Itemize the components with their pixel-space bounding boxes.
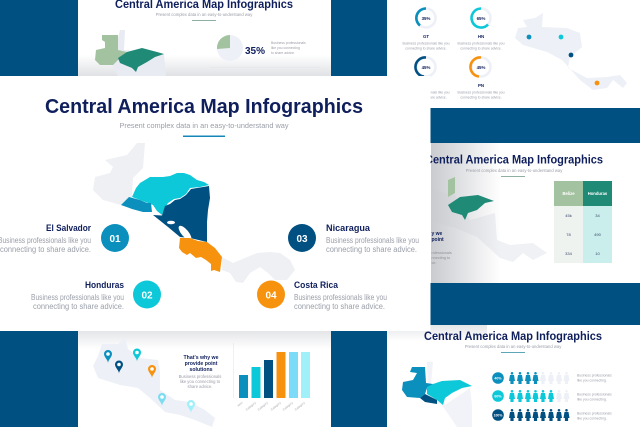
- table: [554, 181, 612, 263]
- right slide grey map: [431, 190, 547, 262]
- item: Nicaragua: connecting to share advice.: [326, 245, 417, 254]
- item: El Salvador: connecting to share advice.: [0, 245, 91, 254]
- row 40%: Business professionals: [577, 374, 612, 378]
- item: Honduras: connecting to share advice.: [33, 302, 124, 311]
- item: El Salvador: 01: [109, 234, 121, 245]
- map: El Salvador: [121, 197, 152, 212]
- donut descriptions: connecting to share advice.: [460, 96, 502, 100]
- pie value: 35%: [245, 46, 265, 57]
- table: 490: [594, 232, 602, 237]
- bar chart: [233, 343, 310, 412]
- right slide subtitle: Present complex data in an easy-to-understand way: [466, 168, 563, 173]
- table: 45k: [565, 213, 572, 218]
- bar chart: Category: [270, 400, 282, 412]
- donut descriptions: connecting to share advice.: [405, 96, 447, 100]
- row 60%: Business professionals: [577, 392, 612, 396]
- map: lakes: [167, 221, 193, 242]
- row 40%: like you connecting.: [577, 378, 607, 382]
- donut labels: PN: [478, 83, 484, 88]
- pie description: to share advice.: [271, 51, 295, 55]
- donut labels: GT: [423, 34, 429, 39]
- donut descriptions: Business professionals like you: [457, 90, 505, 94]
- donut 45 left: [415, 57, 436, 76]
- panel: main slide: [0, 76, 430, 331]
- panel: right slide with table: [387, 143, 640, 283]
- item: Nicaragua: Business professionals like you: [326, 236, 419, 245]
- item: Nicaragua: 03: [296, 234, 308, 245]
- donut labels: [422, 16, 485, 88]
- bottom right subtitle: Present complex data in an easy-to-understand way: [465, 344, 562, 349]
- map: grey countries: [93, 143, 295, 283]
- panel: top slide with pie chart: [78, 0, 331, 76]
- item: Costa Rica: [257, 280, 387, 311]
- right slide text: y we: [432, 231, 443, 237]
- map of Central America: [93, 143, 295, 283]
- item: Nicaragua: [288, 223, 419, 254]
- pin slide heading: solutions: [189, 367, 213, 373]
- pin blue: [104, 350, 112, 363]
- panel: bottom right slide with people rows: [387, 325, 640, 427]
- row 100%: like you connecting.: [577, 416, 607, 420]
- heading underline: [183, 136, 225, 137]
- bar chart: Item: [237, 400, 244, 408]
- item: El Salvador: [0, 223, 129, 254]
- panel: top right slide with donuts and dotted map: [402, 8, 627, 100]
- donut GT: [416, 8, 436, 28]
- item: Honduras: 02: [141, 290, 153, 302]
- pie description: Business professionals: [271, 41, 306, 45]
- bottom right map: [402, 362, 472, 427]
- pin slide text: like you connecting to: [180, 379, 221, 384]
- row 100%: [492, 409, 612, 421]
- pin slide text: Business professionals: [179, 374, 221, 379]
- table: 10: [595, 251, 600, 256]
- table: 78: [566, 232, 571, 237]
- item: El Salvador: El Salvador: [46, 223, 91, 233]
- pin light blue: [158, 393, 166, 406]
- donut HN: [472, 8, 490, 28]
- map: Nicaragua: [153, 186, 210, 242]
- pin slide text: share advice.: [188, 384, 212, 389]
- map: Costa Rica: [179, 238, 222, 272]
- row 40%: [492, 372, 612, 384]
- table: Honduras: [588, 191, 608, 196]
- item: Costa Rica: 04: [265, 290, 277, 302]
- pie chart 35%: [217, 35, 243, 61]
- right slide text: nnecting to: [432, 256, 450, 260]
- item: Honduras: [31, 280, 161, 311]
- bar chart: Category: [245, 400, 257, 412]
- pin map: [93, 338, 215, 427]
- donut descriptions: Business professionals like you: [457, 42, 505, 46]
- main subtitle: Present complex data in an easy-to-understand way: [120, 121, 289, 130]
- pin pale blue: [187, 400, 195, 413]
- row 100%: Business professionals: [577, 412, 612, 416]
- donut labels: 65%: [477, 16, 485, 21]
- top slide map: [95, 30, 166, 76]
- table: 34: [595, 213, 600, 218]
- pin cyan: [133, 348, 141, 362]
- pin orange: [148, 365, 156, 378]
- dotted map: [515, 13, 627, 90]
- donut descriptions: connecting to share advice.: [405, 46, 447, 50]
- row 60%: [492, 390, 612, 402]
- donut labels: HN: [478, 34, 484, 39]
- donut descriptions: Business professionals like you: [402, 90, 450, 94]
- donut descriptions: connecting to share advice.: [460, 46, 502, 50]
- item: Costa Rica: connecting to share advice.: [294, 302, 385, 311]
- item: Honduras: Business professionals like you: [31, 293, 124, 302]
- donut labels: 35%: [422, 16, 430, 21]
- item: Nicaragua: Nicaragua: [326, 223, 371, 233]
- table: Belize: [562, 191, 575, 196]
- item: El Salvador: Business professionals like you: [0, 236, 91, 245]
- row 60%: 60%: [494, 394, 502, 398]
- pin slide heading: That's why we: [184, 355, 219, 361]
- right slide text: ce.: [432, 261, 437, 265]
- right slide title: Central America Map Infographics: [425, 154, 603, 166]
- pin slide heading: [184, 355, 219, 373]
- bottom right title: Central America Map Infographics: [424, 331, 602, 343]
- donut labels: 45%: [422, 65, 430, 70]
- map: Honduras: [132, 173, 209, 215]
- top slide subtitle: Present complex data in an easy-to-understand way: [156, 12, 253, 17]
- item: Costa Rica: Business professionals like you: [294, 293, 387, 302]
- donut labels: 45%: [477, 65, 485, 70]
- pin slide heading: provide point: [185, 361, 218, 367]
- right slide text: [432, 231, 452, 265]
- main title: Central America Map Infographics: [45, 95, 363, 118]
- right slide coloured map: [448, 177, 494, 220]
- right slide text: point: [432, 237, 444, 243]
- item: Costa Rica: Costa Rica: [294, 280, 339, 290]
- pin navy: [115, 360, 123, 374]
- item: Honduras: Honduras: [85, 280, 124, 290]
- donut descriptions: [402, 42, 505, 100]
- panel: bottom left slide with pins and bars: [78, 331, 331, 427]
- row 40%: 40%: [494, 376, 502, 380]
- pin slide text: [179, 374, 221, 389]
- donut 45 right: [470, 57, 490, 76]
- right slide text: rofessionals: [432, 251, 452, 255]
- row 60%: like you connecting.: [577, 398, 607, 402]
- bar chart: Category: [282, 400, 294, 412]
- pie description: like you connecting: [271, 46, 300, 50]
- table: 334: [565, 251, 573, 256]
- bar chart: Category: [257, 400, 269, 412]
- row 100%: 100%: [494, 414, 502, 418]
- bar chart: Category: [294, 400, 306, 412]
- donut descriptions: Business professionals like you: [402, 42, 450, 46]
